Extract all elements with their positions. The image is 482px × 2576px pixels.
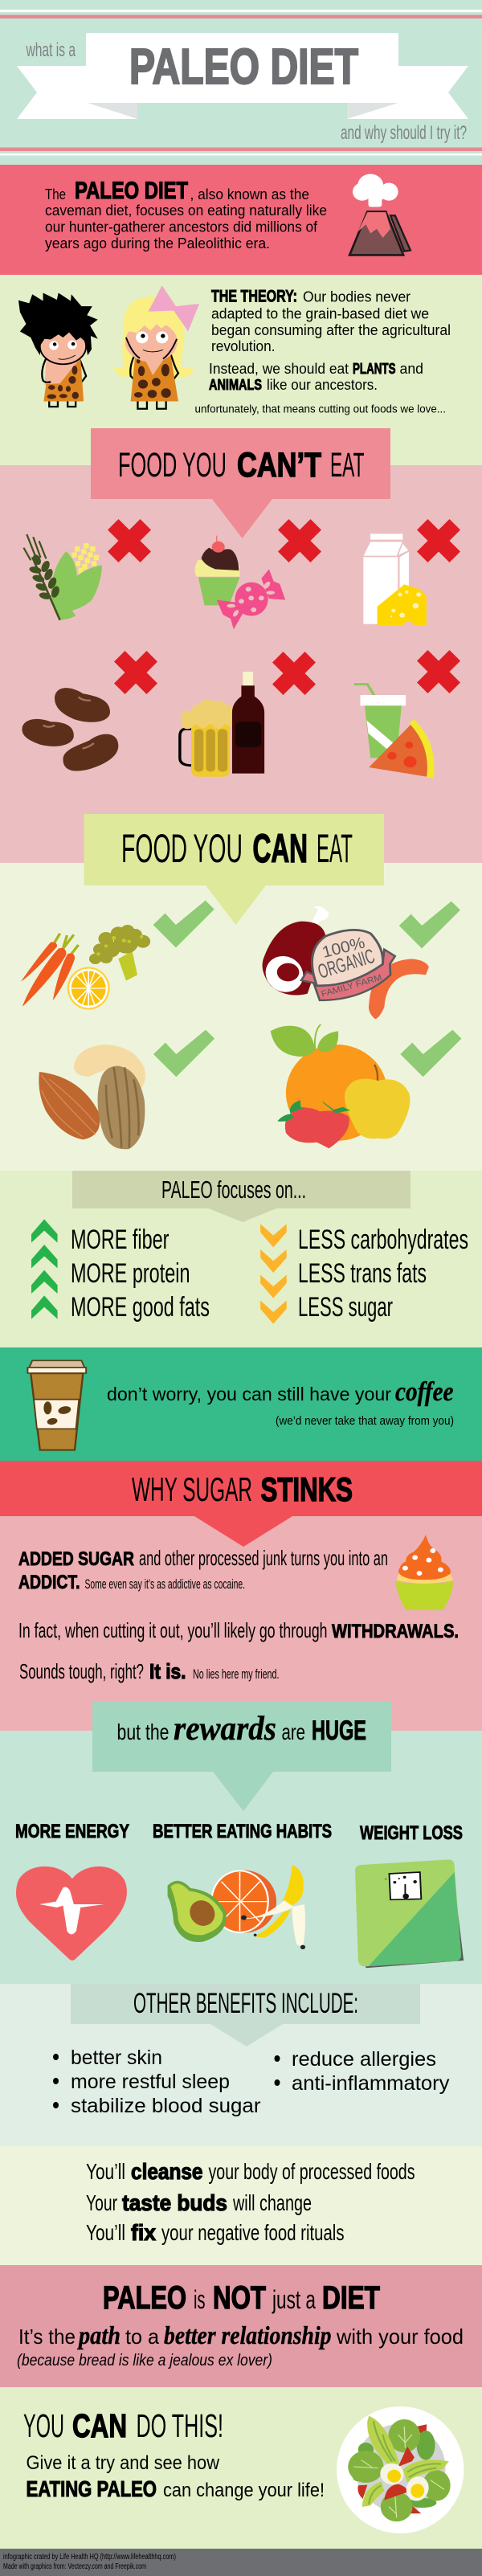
icon: salad plate [337, 2406, 464, 2533]
panel: food you can eat [0, 814, 482, 1171]
theory text: adapted to the grain-based diet we [211, 305, 429, 321]
closing heading: YOU [23, 2407, 64, 2444]
coffee text: coffee [395, 1377, 453, 1407]
kicker: what is a: what is a [26, 39, 76, 61]
intro text: The [45, 186, 66, 202]
heading banner: PALEO focuses on... [161, 1176, 306, 1204]
heading banner: CAN [252, 826, 308, 871]
heading banner: STINKS [260, 1470, 353, 1508]
list: benefits left: better skin [71, 2046, 162, 2069]
theory text: Our bodies never [303, 289, 411, 305]
changes text: Your [86, 2190, 117, 2215]
statement heading: just a [272, 2285, 316, 2314]
heading banner: CAN’T [237, 446, 321, 485]
reward labels: BETTER EATING HABITS [153, 1821, 332, 1842]
icon: wheat and corn [23, 534, 102, 620]
icon: up arrows [31, 1219, 58, 1319]
sugar text: No lies here my friend. [193, 1666, 280, 1682]
coffee text: don’t worry, you can still have your [107, 1384, 391, 1405]
closing text: Give it a try and see how [26, 2452, 220, 2474]
heading banner: WHY SUGAR [132, 1470, 252, 1508]
list: benefits left: more restful sleep [71, 2071, 230, 2093]
list: more: MORE protein [71, 1258, 190, 1289]
list: less [298, 1225, 468, 1323]
sugar text: In fact, when cutting it out, you’ll likely go through [18, 1618, 328, 1642]
statement heading: is [194, 2285, 206, 2314]
icon: caveman [18, 292, 98, 407]
theory text: revolution. [211, 338, 275, 354]
statement heading [103, 2280, 380, 2316]
changes text: cleanse [131, 2159, 202, 2184]
closing text: can change your life! [163, 2480, 325, 2501]
check marks [153, 901, 461, 1077]
panel: coffee [0, 1347, 482, 1461]
theory text: and [400, 361, 423, 377]
intro text: , also known as the [190, 186, 309, 202]
panel: theory [0, 275, 482, 465]
changes text: your negative food rituals [161, 2220, 344, 2245]
theory text: PLANTS [353, 361, 395, 377]
icon: heart [16, 1867, 127, 1961]
icon: volcano [349, 174, 411, 255]
icon: beans [22, 688, 118, 771]
panel: other benefits [0, 1984, 482, 2146]
panel: why sugar stinks [0, 1461, 482, 1731]
statement text [17, 2320, 464, 2370]
icon: cupcake and candy [194, 536, 285, 629]
icon: milk and cheese [363, 534, 427, 625]
theory text: began consuming after the agricultural [211, 322, 451, 338]
panel: footer credits: Made with graphics from: Vecteezy.com and Freepik.com [3, 2562, 146, 2571]
list: more: MORE fiber [71, 1225, 169, 1255]
title: PALEO DIET [129, 39, 358, 95]
x marks [108, 519, 460, 695]
theory text [194, 288, 451, 415]
icon: coffee cup [27, 1360, 86, 1450]
changes text: fix [131, 2220, 156, 2245]
closing heading [23, 2407, 223, 2444]
heading banner: EAT [330, 446, 365, 485]
statement text: better relationship [164, 2320, 331, 2349]
heading banner: rewards [174, 1711, 276, 1748]
panel: intro [0, 165, 482, 275]
intro text: years ago during the Paleolithic era. [45, 235, 270, 251]
icon: nuts [39, 1045, 145, 1149]
statement heading: NOT [213, 2280, 266, 2316]
icon: fruit [271, 1024, 410, 1148]
icon: avocado, orange, banana [168, 1865, 305, 1949]
theory text: ANIMALS [209, 377, 262, 393]
panel: food you can't eat [0, 428, 482, 863]
icon: down arrows [260, 1224, 287, 1324]
changes text: will change [232, 2190, 312, 2215]
heading banner [72, 1171, 411, 1222]
sugar text: ADDED SUGAR [18, 1548, 134, 1570]
list: benefits right: anti-inflammatory [292, 2072, 450, 2095]
heading banner: HUGE [312, 1715, 366, 1746]
coffee text: (we’d never take that away from you) [276, 1415, 454, 1428]
statement text: with your food [336, 2325, 464, 2349]
intro text: caveman diet, focuses on eating naturally like [45, 202, 327, 219]
list: benefits right [275, 2048, 450, 2095]
changes text: You’ll [86, 2220, 125, 2245]
heading banner: EAT [317, 826, 353, 871]
icon: scale [355, 1859, 464, 1968]
heading banner [0, 1461, 482, 1547]
icon: beer and wine [180, 672, 264, 777]
icon: cupcake [396, 1535, 453, 1610]
closing heading: DO THIS! [137, 2407, 223, 2444]
heading banner: are [281, 1719, 305, 1744]
heading banner [84, 814, 384, 925]
panel: you can do this [0, 2387, 482, 2549]
panel: footer credits: infographic crated by Life Health HQ (http://www.lifehealthhq.com) [3, 2553, 176, 2562]
icon: meat with organic badge: FAMILY FARM [321, 973, 383, 1000]
sugar text: WITHDRAWALS. [332, 1621, 459, 1642]
icon: vegetables [21, 925, 150, 1010]
theory text: like our ancestors. [267, 377, 378, 393]
sugar text: Some even say it’s as addictive as cocaine. [85, 1576, 245, 1592]
panel: changes [0, 2146, 482, 2265]
heading banner [91, 428, 390, 538]
theory text: THE THEORY: [211, 288, 297, 305]
statement heading: PALEO [103, 2280, 186, 2316]
statement heading: DIET [322, 2280, 380, 2316]
panel: rewards [0, 1701, 482, 1984]
reward labels: MORE ENERGY [15, 1821, 129, 1842]
list: more [71, 1225, 210, 1323]
theory text: unfortunately, that means cutting out foods we love... [194, 403, 446, 415]
icon: meat with organic badge: ORGANIC [316, 945, 378, 983]
closing text: EATING PALEO [26, 2476, 157, 2501]
list: more: MORE good fats [71, 1292, 210, 1323]
changes text: taste buds [122, 2190, 227, 2215]
reward labels [15, 1821, 463, 1844]
sugar text [18, 1546, 459, 1683]
sugar text: ADDICT. [18, 1572, 80, 1593]
panel: footer credits [0, 2549, 482, 2576]
statement text: to a [125, 2325, 160, 2349]
heading banner: FOOD YOU [118, 446, 227, 485]
changes text [86, 2159, 415, 2245]
icon: drink and pizza [354, 685, 435, 779]
heading banner [92, 1701, 391, 1811]
icon: cavewoman [113, 285, 199, 409]
coffee text [107, 1377, 454, 1428]
icon: meat with organic badge: 100% [321, 934, 367, 962]
list: benefits right: reduce allergies [292, 2048, 436, 2071]
theory text: Instead, we should eat [209, 361, 349, 377]
panel: paleo focuses on [0, 1171, 482, 1347]
statement text: path [76, 2320, 120, 2349]
list: benefits left: stabilize blood sugar [71, 2095, 260, 2117]
heading banner: but the [117, 1719, 169, 1744]
statement text: (because bread is like a jealous ex lover) [17, 2352, 272, 2370]
intro text [45, 178, 327, 251]
list: benefits left [53, 2046, 260, 2117]
panel: header [0, 0, 482, 165]
icon: meat with organic badge [260, 906, 429, 1019]
closing text [26, 2452, 325, 2501]
sugar text: It is. [149, 1659, 186, 1683]
title ribbon [17, 33, 468, 119]
heading banner [71, 1984, 420, 2046]
intro text: our hunter-gatherer ancestors did millions of [45, 219, 318, 235]
list: less: LESS sugar [298, 1292, 393, 1323]
heading banner: FOOD YOU [121, 826, 243, 871]
intro text: PALEO DIET [75, 178, 188, 204]
panel: not just a diet [0, 2265, 482, 2387]
closing heading: CAN [72, 2407, 127, 2444]
sugar text: Sounds tough, right? [19, 1659, 144, 1683]
changes text: You’ll [86, 2159, 125, 2184]
statement text: It’s the [18, 2325, 76, 2349]
